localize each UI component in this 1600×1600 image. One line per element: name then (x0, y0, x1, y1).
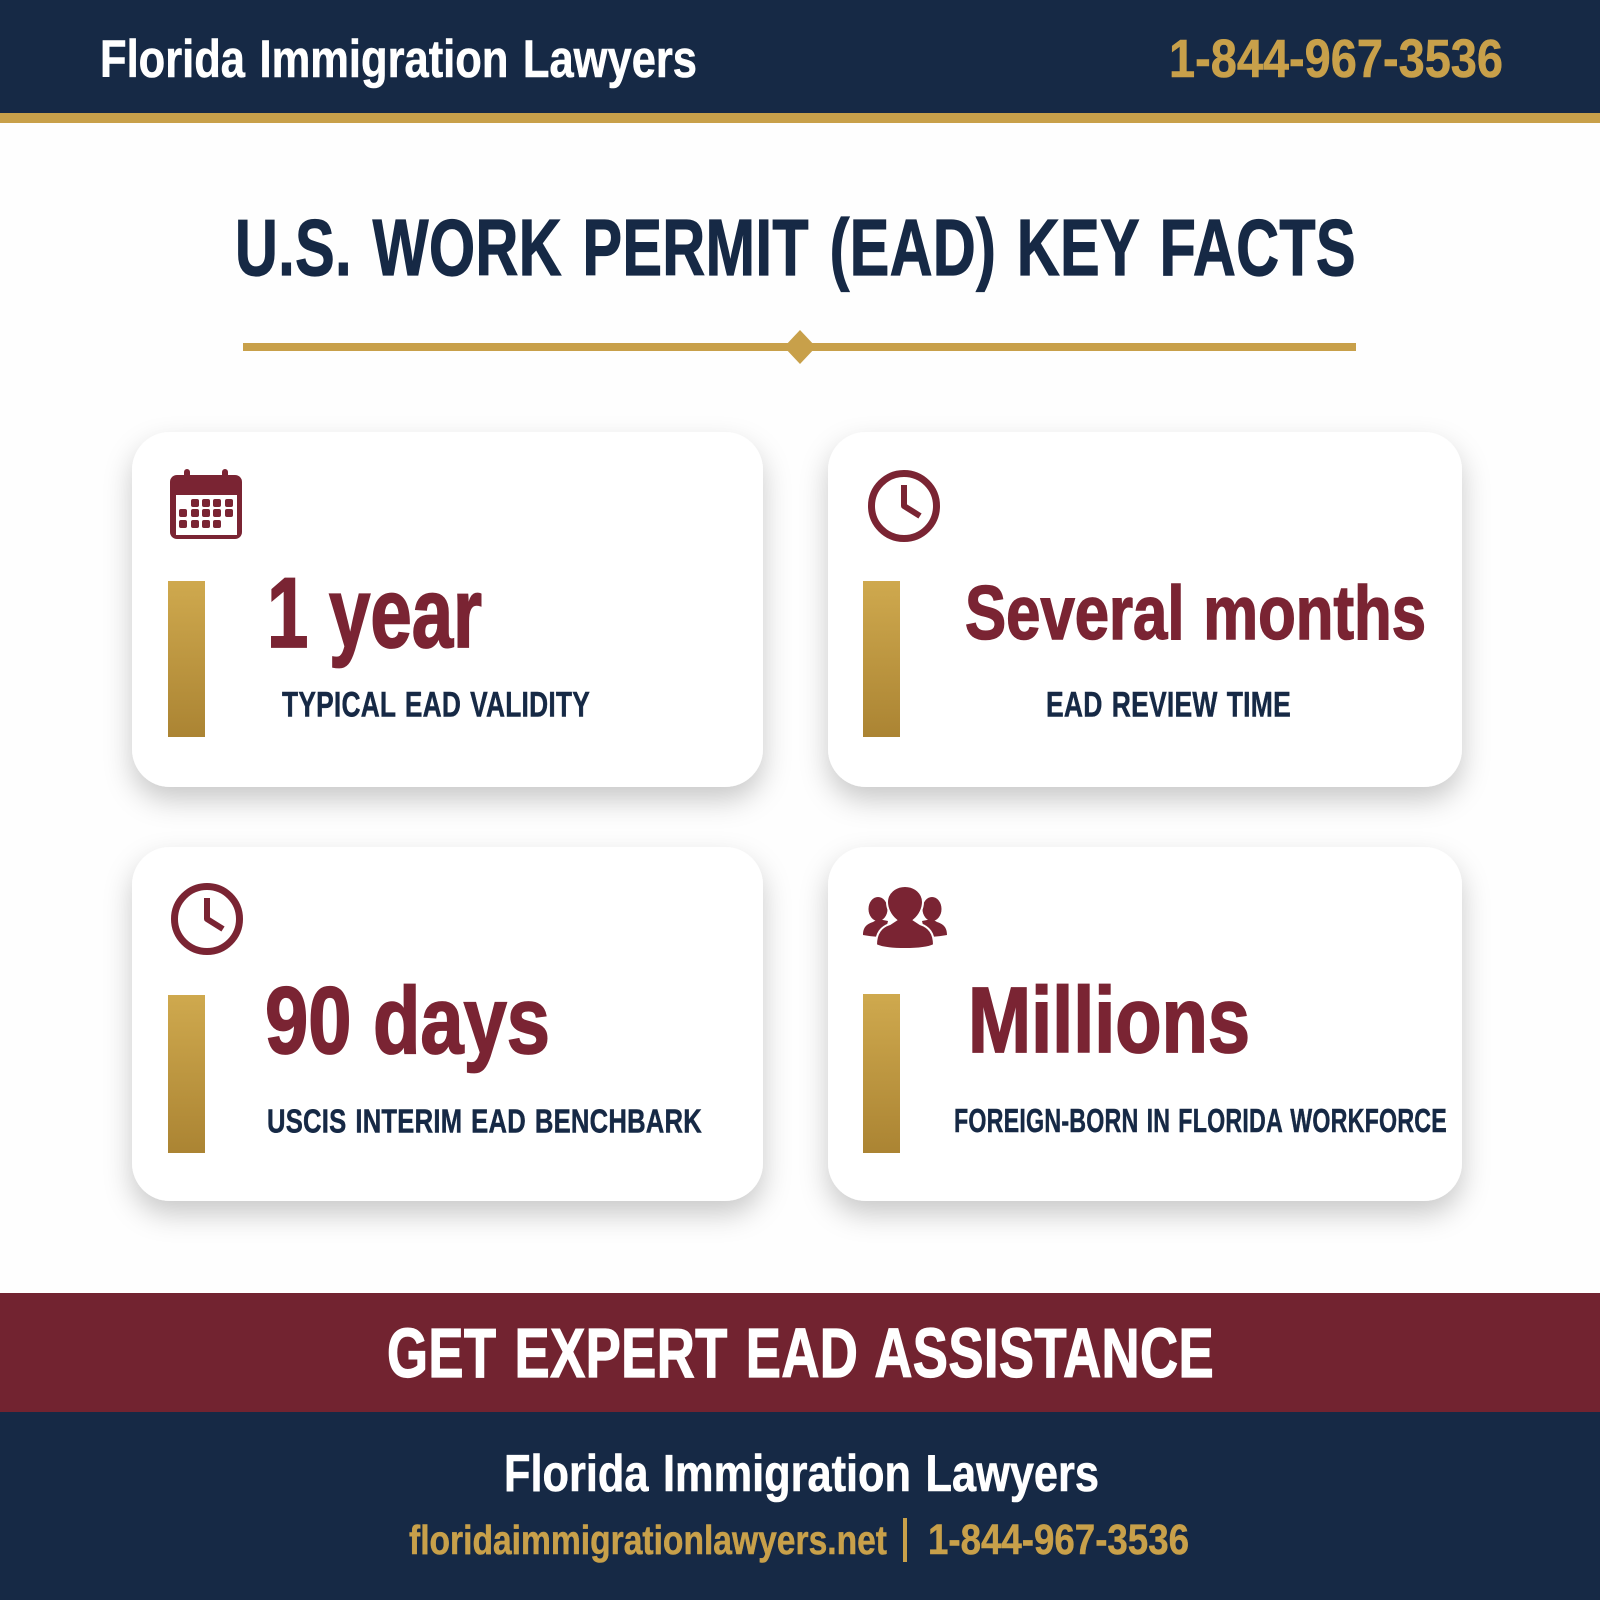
gold accent bar (168, 581, 205, 737)
icon: calendar (170, 469, 242, 539)
panel: USCIS interim EAD benchmark (132, 847, 763, 1201)
footer firm name: Florida Immigration Lawyers (504, 1445, 1099, 1503)
gold accent bar (168, 995, 205, 1153)
footer (0, 1412, 1600, 1600)
gold accent bar (863, 994, 900, 1153)
stat value: 90 days (265, 968, 550, 1074)
icon: clock (872, 474, 936, 538)
icon: clock (174, 886, 240, 952)
footer website and phone: 1-844-967-3536 (928, 1516, 1189, 1564)
header bar (0, 0, 1600, 123)
gold accent bar (863, 581, 900, 737)
header firm name: Florida Immigration Lawyers (100, 30, 697, 89)
stat label: USCIS INTERIM EAD BENCHBARK (267, 1102, 702, 1140)
stat value: 1 year (267, 557, 482, 668)
call-to-action banner (0, 1293, 1600, 1413)
title divider with diamond (243, 330, 1356, 364)
icon: people group (863, 886, 947, 949)
call-to-action text: GET EXPERT EAD ASSISTANCE (387, 1314, 1214, 1392)
stat label: TYPICAL EAD VALIDITY (282, 686, 590, 724)
panel: EAD review time (828, 432, 1462, 787)
header phone number: 1-844-967-3536 (1169, 29, 1503, 89)
stat value: Several months (965, 571, 1426, 656)
panel: foreign-born in Florida workforce (828, 847, 1462, 1201)
stat value: Millions (968, 968, 1250, 1072)
panel: typical EAD validity (132, 432, 763, 787)
stat label: EAD REVIEW TIME (1046, 686, 1291, 724)
footer website and phone: floridaimmigrationlawyers.net (409, 1517, 887, 1563)
